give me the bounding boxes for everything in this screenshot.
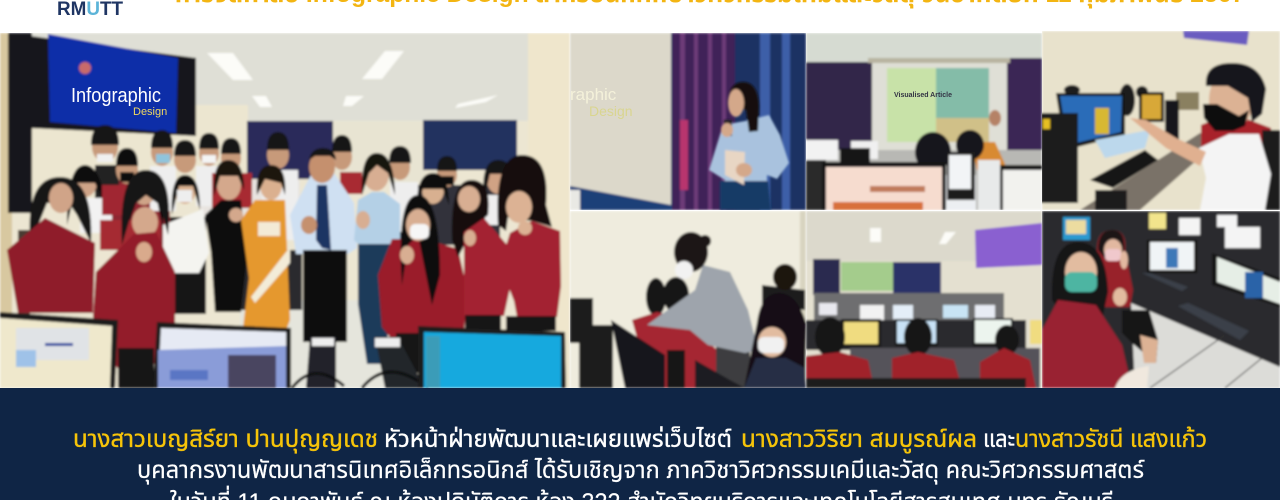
projected text: raphic [570, 85, 617, 104]
screen title text: Design [133, 106, 167, 118]
person: woman in orange dress [241, 165, 290, 328]
caption line 1: หัวหน้าฝ่ายพัฒนาและเผยแพร่เว็บไซต์ [384, 425, 732, 453]
monitor: right [418, 326, 566, 388]
caption line 1: และ [983, 426, 1015, 453]
caption line 1: นางสาวเบญสิร์ยา ปานปุญญเดช [73, 426, 378, 454]
slide title: Visualised Article [894, 92, 952, 99]
caption line 1 [73, 425, 1207, 454]
projected text: Design [589, 103, 633, 119]
photo: student pointing at monitor [1041, 31, 1280, 210]
screen title text [71, 85, 167, 118]
monitor: left [0, 312, 118, 388]
speaker [709, 82, 789, 210]
photo: group portrait [0, 33, 570, 388]
screen title text: Infographic [71, 85, 161, 107]
person: girl with white mask [378, 195, 467, 373]
photo: instructor helping students [570, 211, 806, 388]
person: man in blue shirt [290, 148, 357, 342]
photo: speaker at projector [570, 33, 806, 210]
photo: computer lab overview [806, 211, 1042, 388]
projected text [571, 88, 632, 119]
crowd backdrop [110, 178, 172, 247]
photo: lecture room with slide [806, 33, 1042, 210]
person: front left student [93, 170, 175, 388]
caption band [0, 388, 1280, 500]
person: student with glasses [498, 155, 561, 331]
person: woman in light blue [354, 153, 400, 364]
computer towers [292, 337, 428, 388]
caption line 1: นางสาวรัชนี แสงแก้ว [1015, 426, 1207, 453]
caption line 1: นางสาววิริยา สมบูรณ์ผล [741, 426, 977, 454]
caption line 2: บุคลากรงานพัฒนาสารนิเทศอิเล็กทรอนิกส์ ได้รับเชิญจาก ภาควิชาวิศวกรรมเคมีและวัสดุ คณะวิศวกรรมศาสตร์ [137, 456, 1145, 485]
person: woman in black dress [205, 160, 247, 312]
monitor: centre [153, 322, 291, 388]
photo: two students with peace signs [1042, 211, 1280, 388]
person: student in hijab [452, 180, 510, 330]
